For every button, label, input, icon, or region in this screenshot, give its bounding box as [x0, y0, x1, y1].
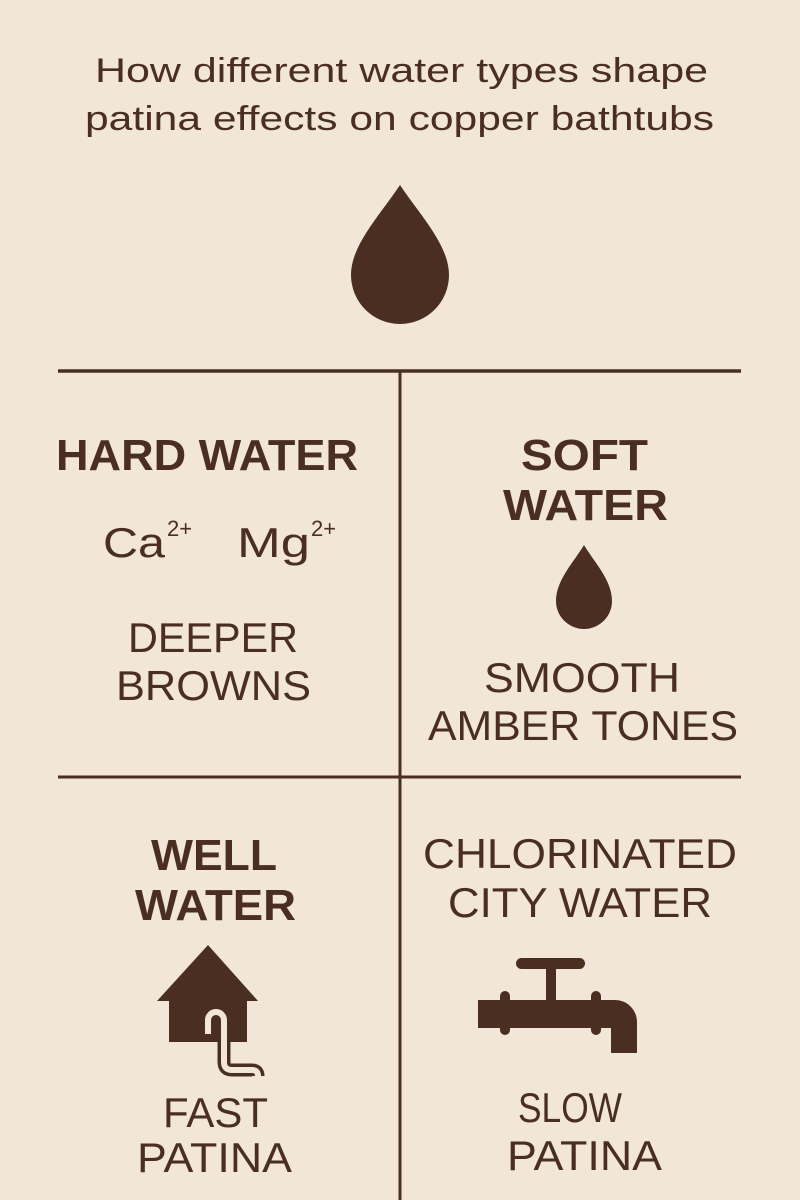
heading: well water: WATER: [135, 881, 296, 930]
title: [85, 52, 714, 138]
heading: hard water: HARD WATER: [56, 431, 358, 480]
icon: house with well pipe: [157, 945, 258, 1076]
panel: hard water: [56, 431, 358, 709]
title: How different water types shape: [95, 52, 708, 90]
effect: slow patina: [507, 1084, 662, 1179]
effect: smooth amber tones: [428, 654, 738, 749]
heading: soft water: SOFT: [521, 431, 648, 480]
effect: deeper browns: DEEPER: [128, 614, 298, 661]
heading: chlorinated city water: [423, 830, 737, 926]
heading: well water: WELL: [151, 831, 277, 880]
ions: 2+: [311, 516, 336, 541]
title: patina effects on copper bathtubs: [85, 100, 714, 138]
ions: Mg: [237, 519, 310, 566]
panel: well water: [135, 831, 296, 1181]
ions: Ca: [103, 519, 166, 566]
effect: deeper browns: BROWNS: [116, 662, 311, 709]
ions: [103, 516, 336, 566]
panel: soft water: [428, 431, 738, 749]
icon: large water drop: [351, 185, 449, 324]
effect: smooth amber tones: AMBER TONES: [428, 702, 738, 749]
heading: soft water: [503, 431, 668, 530]
icon: faucet pipe: [478, 958, 637, 1053]
effect: fast patina: PATINA: [137, 1134, 292, 1181]
effect: fast patina: [137, 1089, 292, 1181]
ions: 2+: [167, 516, 192, 541]
heading: well water: [135, 831, 296, 930]
effect: slow patina: PATINA: [507, 1132, 662, 1179]
heading: soft water: WATER: [503, 481, 668, 530]
effect: smooth amber tones: SMOOTH: [484, 654, 680, 701]
heading: chlorinated city water: CHLORINATED: [423, 830, 737, 877]
panel: chlorinated city water: [423, 830, 737, 1179]
heading: chlorinated city water: CITY WATER: [448, 879, 712, 926]
effect: fast patina: FAST: [163, 1089, 268, 1136]
icon: small drop: [556, 545, 612, 629]
effect: deeper browns: [116, 614, 311, 709]
effect: slow patina: SLOW: [518, 1084, 622, 1131]
